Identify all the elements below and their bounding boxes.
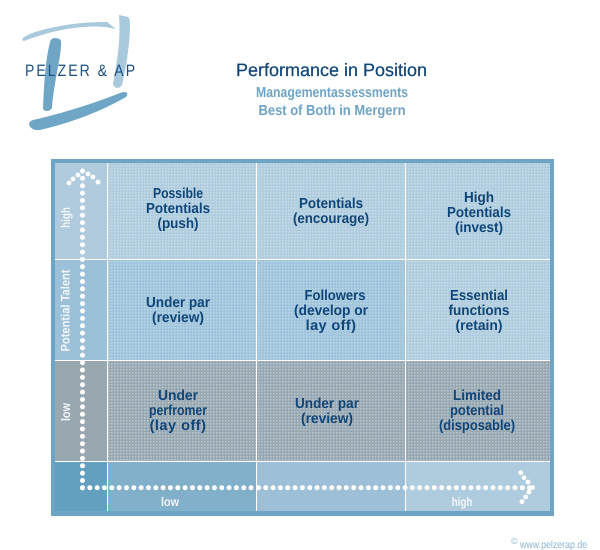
logo stroke: light top [22, 22, 116, 41]
matrix cell: high potentials: High [464, 190, 494, 206]
logo stroke: light right [113, 15, 130, 88]
matrix cell: under performer [108, 361, 256, 461]
logo wordmark: PELZER & AP [25, 62, 137, 80]
matrix cell: possible potentials: (push) [158, 216, 199, 232]
matrix cell: under par review: (review) [152, 310, 204, 326]
footer: copyright url [511, 536, 587, 550]
matrix cell: followers: Followers [305, 288, 365, 304]
matrix cell: limited potential: Limited [453, 388, 501, 404]
matrix cell: under par review low: Under par [295, 396, 359, 412]
matrix cell: under par review [108, 260, 256, 360]
dotted axis arrow: horizontal [82, 470, 535, 504]
matrix frame [51, 159, 554, 516]
subtitle line 2: Best of Both in Mergern [258, 103, 406, 119]
matrix cell: under performer: Under [158, 388, 198, 404]
y axis label: high: high [59, 207, 73, 228]
matrix cell: high potentials: (invest) [455, 220, 503, 236]
matrix panel [51, 159, 554, 516]
matrix cell: under par review low [257, 361, 405, 461]
logo stroke: dark bottom [29, 92, 127, 130]
matrix cell: under par review: Under par [146, 295, 210, 311]
matrix cell: essential functions: Essential [450, 288, 508, 304]
matrix cell: followers [257, 260, 405, 360]
matrix cell: essential functions: functions [449, 303, 509, 319]
matrix cell: under par review low: (review) [301, 411, 353, 427]
x axis label: high: high [452, 495, 472, 509]
matrix cell: essential functions [406, 260, 550, 360]
matrix cell: potentials: Potentials [299, 196, 363, 212]
matrix cell: possible potentials: Possible [153, 186, 203, 202]
title: Performance in Position [236, 60, 427, 80]
left axis column cells [55, 163, 107, 461]
logo [22, 15, 137, 130]
matrix cell: possible potentials: Potentials [146, 201, 210, 217]
matrix cell: under performer: perfromer [149, 403, 207, 419]
dotted axis arrow: vertical [67, 171, 100, 488]
logo stroke: dark vertical [43, 38, 61, 111]
x axis label: low: low [161, 495, 179, 509]
matrix cell: under performer: (lay off) [150, 418, 206, 434]
matrix cell: limited potential: potential [450, 403, 504, 419]
matrix cell: possible potentials [108, 163, 256, 259]
matrix cell: potentials [257, 163, 405, 259]
matrix cell: high potentials [406, 163, 550, 259]
grid lines [55, 163, 550, 511]
matrix cell: followers: lay off) [306, 318, 356, 334]
matrix cell: limited potential [406, 361, 550, 461]
y axis label: potential talent: Potential Talent [58, 269, 72, 352]
matrix cell: limited potential: (disposable) [439, 418, 515, 434]
matrix cell: potentials: (encourage) [293, 211, 369, 227]
matrix cell: followers: (develop or [294, 303, 368, 319]
y axis label: low: low [59, 403, 73, 421]
bottom axis row cells [55, 462, 550, 511]
subtitle line 1: Managementassessments [256, 85, 408, 101]
matrix cell: essential functions: (retain) [455, 318, 503, 334]
matrix cell: high potentials: Potentials [447, 205, 511, 221]
footer: copyright url: © [511, 536, 518, 546]
